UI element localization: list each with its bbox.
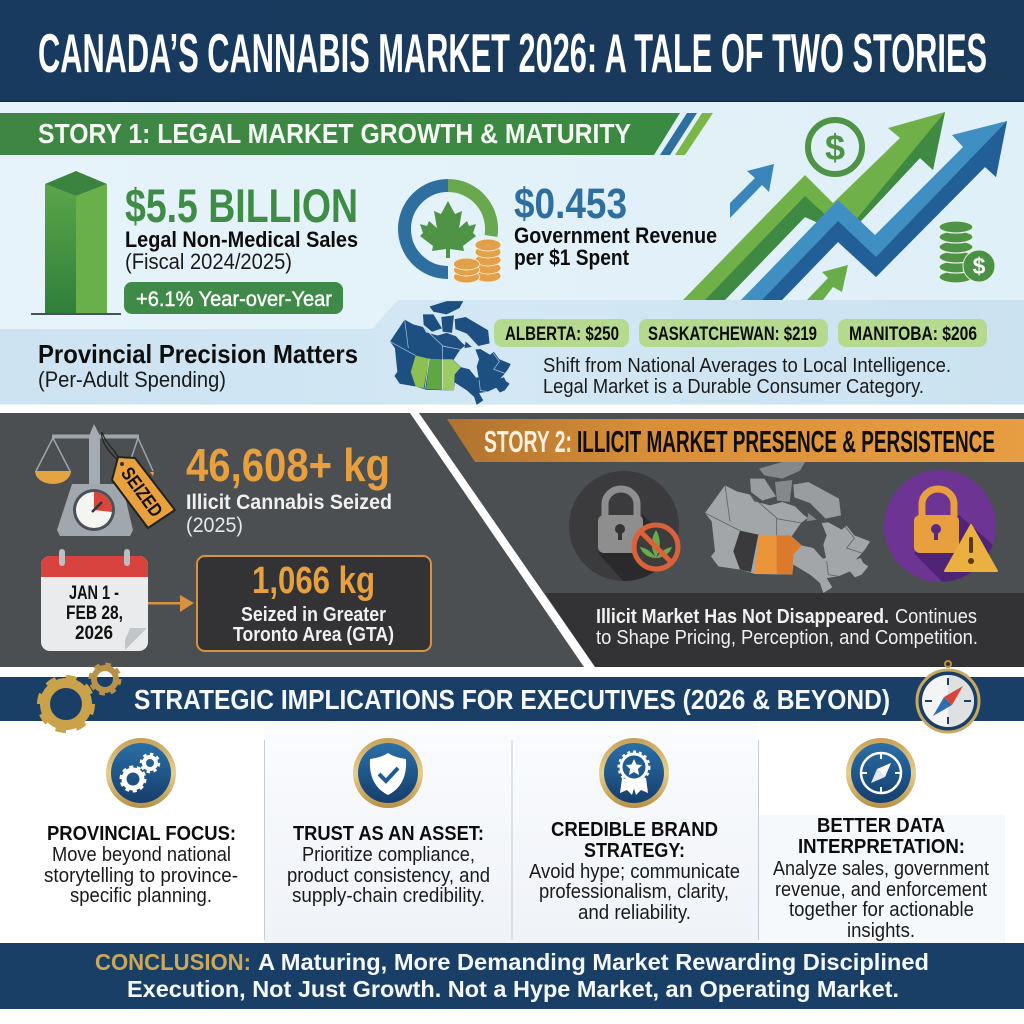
header band <box>0 0 1024 102</box>
stat: legal sales: (Fiscal 2024/2025) <box>125 249 292 274</box>
text: better data interpretation <box>773 815 989 942</box>
icon: calendar: 2026 <box>75 623 113 644</box>
text: provincial focus: specific planning. <box>70 885 212 907</box>
callout: gta seizure <box>197 556 431 651</box>
growth pill: +6.1% Year-over-Year <box>136 288 332 311</box>
map: canada with prairies highlighted <box>390 301 511 405</box>
text: provincial focus: Move beyond national <box>52 844 231 866</box>
heading: provincial precision: (Per-Adult Spending) <box>38 367 226 392</box>
icon: dollar circle <box>808 120 862 174</box>
icon: calendar <box>41 549 148 651</box>
text: trust as an asset: Prioritize compliance, <box>302 844 475 866</box>
stat: legal sales: $5.5 BILLION <box>125 179 358 232</box>
column: credible brand strategy <box>529 738 740 924</box>
pill: alberta <box>494 319 629 347</box>
text: credible brand strategy <box>529 819 740 924</box>
stat: government revenue <box>514 180 717 270</box>
story 2 ribbon: STORY 2: <box>484 424 572 459</box>
column: provincial focus <box>44 738 238 907</box>
pill: saskatchewan <box>639 319 828 347</box>
stat: seized kg <box>186 439 392 537</box>
icon: green 3d bar <box>31 171 121 315</box>
stat: seized kg: Illicit Cannabis Seized <box>186 491 392 514</box>
text: credible brand strategy: STRATEGY: <box>584 840 685 862</box>
text: credible brand strategy: Avoid hype; communicate <box>529 861 740 883</box>
panel: provincial precision band <box>0 300 1024 405</box>
map: gray canada with prairies highlighted <box>705 462 870 593</box>
text: local intelligence: Legal Market is a Durable Consumer Category. <box>543 376 924 398</box>
stat: government revenue: Government Revenue <box>514 223 717 248</box>
panel: strategic columns background <box>264 721 1005 943</box>
text: credible brand strategy: professionalism, clarity, <box>539 881 729 903</box>
arrow: calendar to gta box <box>148 595 194 612</box>
stat: seized kg: (2025) <box>186 514 243 537</box>
icon: gold gears <box>40 664 120 730</box>
icon: donut with maple leaf and coins <box>405 185 501 283</box>
text: trust as an asset: product consistency, and <box>287 865 490 887</box>
text: local intelligence <box>543 355 951 398</box>
icon: scale with seized tag: SEIZED <box>116 464 166 521</box>
text: illicit market caption: Illicit Market Has Not Disappeared. <box>596 606 889 628</box>
conclusion band <box>0 943 1024 1009</box>
stat: legal sales <box>125 179 358 274</box>
text: better data interpretation: insights. <box>847 920 915 942</box>
panel: story 2 illicit market <box>0 413 1024 667</box>
stat: government revenue: per $1 Spent <box>514 245 630 270</box>
callout: gta seizure: Toronto Area (GTA) <box>233 624 394 646</box>
stat: legal sales: Legal Non-Medical Sales <box>125 227 358 252</box>
icon: gears badge <box>106 738 176 808</box>
strategic implications heading band <box>0 677 1024 721</box>
story 2 ribbon <box>447 419 1024 462</box>
callout: gta seizure: Seized in Greater <box>241 604 386 626</box>
text: provincial focus: PROVINCIAL FOCUS: <box>47 823 236 845</box>
column: better data interpretation <box>773 738 989 942</box>
text: better data interpretation: Analyze sales, government <box>773 858 989 880</box>
icon: green coin stack with dollar: $ <box>973 253 986 279</box>
callout: gta seizure: 1,066 kg <box>252 560 375 602</box>
icon: calendar: JAN 1 - <box>69 583 119 604</box>
strategic implications heading band: STRATEGIC IMPLICATIONS FOR EXECUTIVES (2026 & BEYOND) <box>134 684 890 715</box>
icon: rosette badge <box>599 738 669 808</box>
text: trust as an asset: TRUST AS AN ASSET: <box>293 823 484 845</box>
text: credible brand strategy: and reliability. <box>578 902 691 924</box>
text: illicit market caption <box>596 606 978 649</box>
heading: provincial precision <box>38 339 358 392</box>
pill: manitoba: MANITOBA: $206 <box>849 324 977 345</box>
heading: provincial precision: Provincial Precision Matters <box>38 339 358 369</box>
story 1 ribbon: STORY 1: LEGAL MARKET GROWTH & MATURITY <box>38 118 631 149</box>
icon: purple lock with warning <box>884 470 998 582</box>
pill: manitoba <box>838 319 987 347</box>
pill: alberta: ALBERTA: $250 <box>505 324 619 345</box>
text: better data interpretation: together for actionable <box>789 899 974 921</box>
text: trust as an asset: supply-chain credibility. <box>292 885 485 907</box>
icon: calendar: FEB 28, <box>66 603 123 624</box>
icon: scale with seized tag <box>35 424 175 536</box>
text: trust as an asset <box>287 823 490 907</box>
column: trust as an asset <box>287 738 490 907</box>
story 1 ribbon <box>0 113 713 155</box>
stat: seized kg: 46,608+ kg <box>186 439 390 491</box>
text: illicit market caption: Continues <box>895 606 977 628</box>
icon: compass <box>917 661 979 732</box>
stat: government revenue: $0.453 <box>514 180 627 228</box>
text: illicit market caption: to Shape Pricing, Perception, and Competition. <box>596 627 978 649</box>
growth pill <box>124 282 343 314</box>
text: credible brand strategy: CREDIBLE BRAND <box>551 819 718 841</box>
text: better data interpretation: INTERPRETATION: <box>798 836 965 858</box>
text: better data interpretation: BETTER DATA <box>817 815 945 837</box>
growth arrows <box>683 112 1007 300</box>
conclusion band: CONCLUSION: <box>95 949 251 975</box>
conclusion band: Execution, Not Just Growth. Not a Hype Market, an Operating Market. <box>127 976 899 1002</box>
panel: story 1 legal market <box>0 102 1024 405</box>
pill: saskatchewan: SASKATCHEWAN: $219 <box>648 324 817 345</box>
text: better data interpretation: revenue, and enforcement <box>775 879 987 901</box>
conclusion band: A Maturing, More Demanding Market Rewarding Disciplined <box>258 949 929 975</box>
icon: dollar circle: $ <box>825 127 845 168</box>
text: provincial focus <box>44 823 238 907</box>
icon: gray lock with no-cannabis sign <box>569 471 680 581</box>
text: local intelligence: Shift from National Averages to Local Intelligence. <box>543 355 951 377</box>
icon: compass badge <box>846 738 916 808</box>
icon: green coin stack with dollar <box>939 221 995 283</box>
text: provincial focus: storytelling to province- <box>44 865 238 887</box>
icon: shield badge <box>353 738 423 808</box>
